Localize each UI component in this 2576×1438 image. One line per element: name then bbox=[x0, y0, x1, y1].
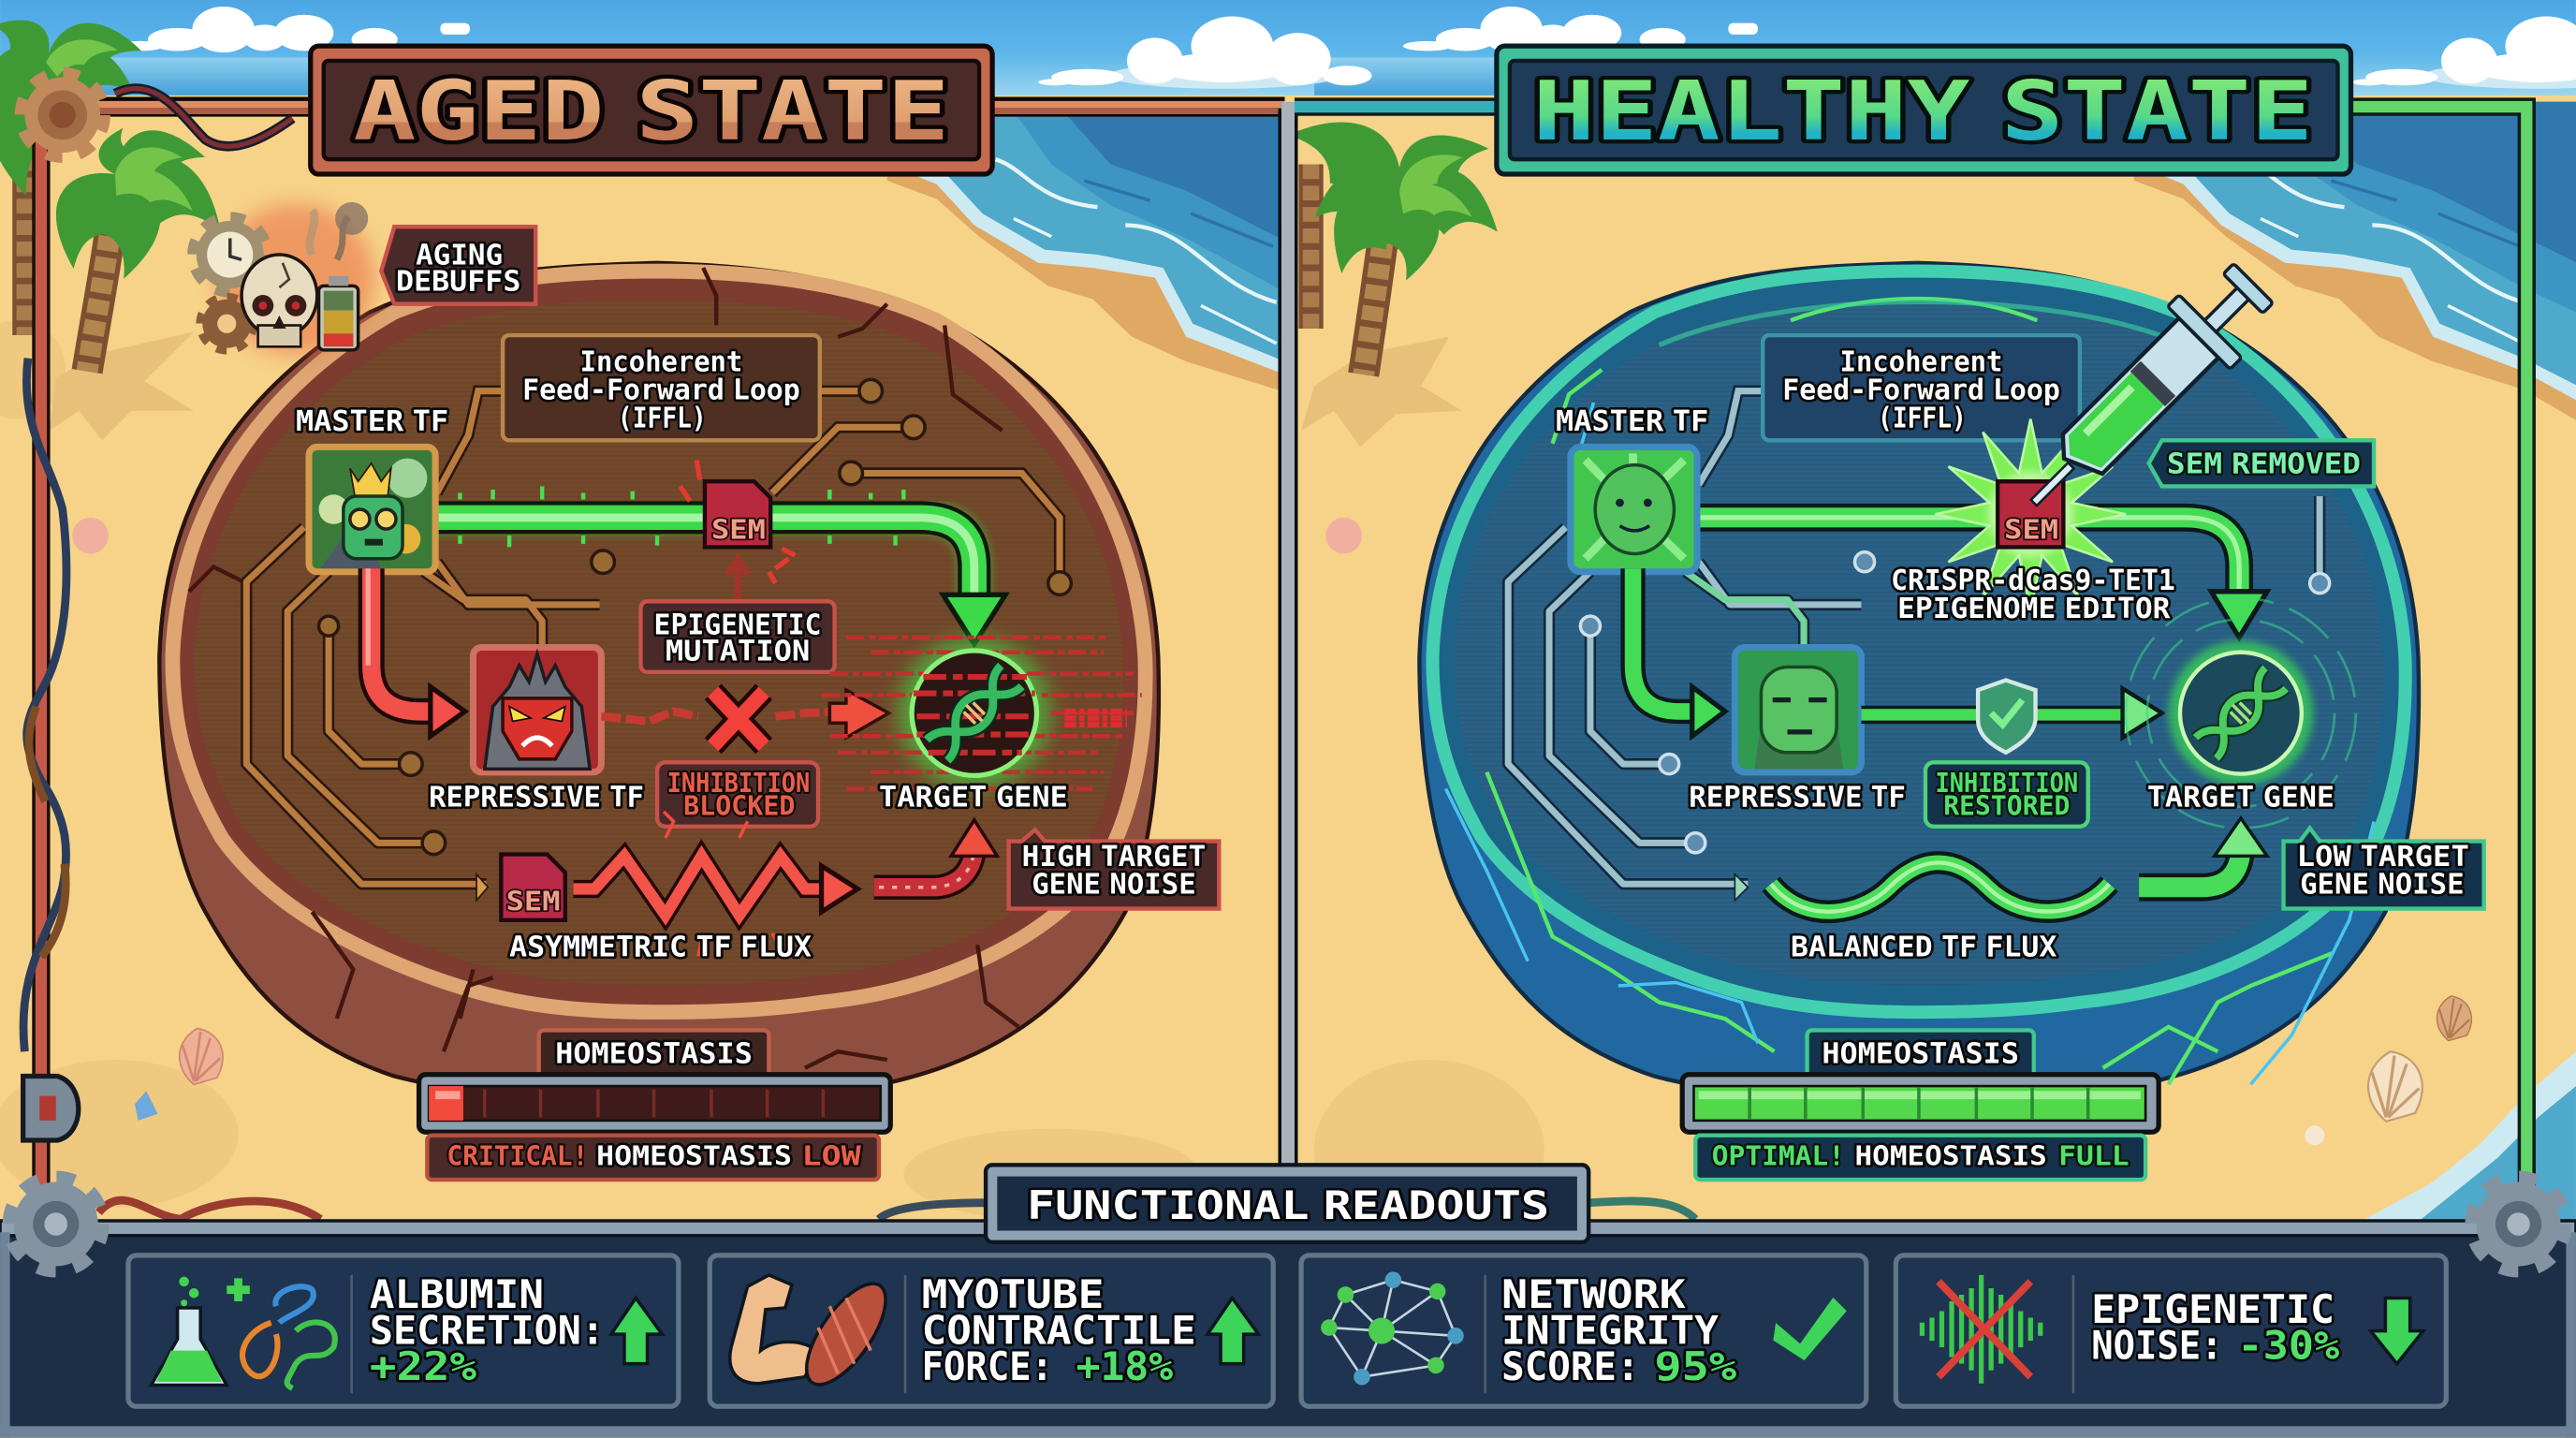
broken inhibition line bbox=[601, 690, 889, 746]
high target gene noise label: HIGH TARGET bbox=[1022, 841, 1206, 873]
frame: healthy panel pipes bbox=[1295, 107, 2526, 1199]
card: network integrity bbox=[1301, 1255, 1866, 1406]
homeostasis meter aged: HOMEOSTASIS bbox=[596, 1140, 792, 1171]
aging debuffs label bbox=[381, 227, 535, 304]
homeostasis meter aged: HOMEOSTASIS bbox=[555, 1038, 753, 1071]
icon: check mark bbox=[1776, 1301, 1843, 1357]
inhibition blocked label: INHIBITION bbox=[667, 768, 810, 799]
homeostasis meter aged bbox=[419, 1030, 890, 1180]
icon: master tf healthy bbox=[1571, 447, 1697, 572]
burst and sem mark healthy: SEM bbox=[2004, 515, 2058, 546]
iffl label healthy: Feed-Forward Loop bbox=[1782, 374, 2060, 406]
card: network integrity: SCORE: bbox=[1501, 1343, 1640, 1389]
burst and sem mark healthy bbox=[1935, 419, 2126, 609]
icon: master tf aged bbox=[309, 447, 435, 572]
aged cell oval bbox=[159, 263, 1159, 1097]
iffl label: Incoherent bbox=[580, 346, 742, 379]
icon: arm and muscle bbox=[730, 1271, 900, 1397]
noisy output arrow bbox=[874, 820, 997, 888]
low target gene noise label bbox=[2284, 829, 2484, 909]
homeostasis meter healthy: HOMEOSTASIS bbox=[1822, 1038, 2019, 1071]
palm trees bbox=[0, 2, 1508, 374]
card: albumin secretion: ALBUMIN bbox=[370, 1271, 544, 1317]
asymmetric flux zigzag bbox=[574, 812, 857, 956]
green arrow to repressive bbox=[1633, 568, 1725, 736]
frame: center divider bbox=[1278, 102, 1298, 1219]
mutation arrow bbox=[728, 559, 748, 600]
balanced output arrow bbox=[2139, 818, 2267, 888]
crispr editor label: EPIGENOME EDITOR bbox=[1897, 593, 2170, 625]
gear: right bbox=[2473, 1179, 2564, 1269]
card: epigenetic noise bbox=[1895, 1255, 2446, 1406]
epigenetic mutation label: MUTATION bbox=[666, 636, 810, 668]
card: myotube force: +18% bbox=[1076, 1343, 1174, 1389]
card: epigenetic noise: EPIGENETIC bbox=[2091, 1286, 2334, 1332]
crispr editor label: CRISPR-dCas9-TET1 bbox=[1891, 565, 2175, 597]
healthy cell oval bbox=[1419, 263, 2419, 1097]
icon: network bbox=[1321, 1271, 1464, 1385]
aged title banner: AGED STATE bbox=[353, 64, 949, 159]
sem removed label: SEM REMOVED bbox=[2167, 448, 2361, 480]
card: albumin secretion: +22% bbox=[370, 1343, 477, 1389]
icon: down arrow bbox=[2371, 1298, 2423, 1364]
inhibition blocked label: BLOCKED bbox=[683, 790, 795, 821]
sem doc lower: SEM bbox=[506, 886, 561, 917]
icon: repressive tf aged bbox=[474, 647, 601, 772]
aged circuit pipes bbox=[246, 379, 1071, 901]
master tf label healthy: MASTER TF bbox=[1556, 405, 1708, 438]
healthy title banner bbox=[1497, 46, 2351, 174]
card: myotube force: CONTRACTILE bbox=[922, 1308, 1196, 1354]
sem mark aged bbox=[681, 460, 795, 583]
low target gene noise label: GENE NOISE bbox=[2300, 869, 2465, 902]
icon: target gene aged bbox=[822, 638, 1142, 788]
target gene label: TARGET GENE bbox=[879, 782, 1068, 814]
inhibition restored label bbox=[1925, 762, 2088, 827]
card: albumin secretion: SECRETION: bbox=[370, 1308, 605, 1354]
homeostasis meter aged: LOW bbox=[802, 1140, 861, 1171]
homeostasis meter healthy: OPTIMAL! bbox=[1712, 1140, 1845, 1171]
sem doc lower bbox=[501, 855, 565, 920]
panel: healthy state bbox=[1419, 46, 2484, 1180]
icon: noise crossed bbox=[1922, 1275, 2041, 1384]
high target gene noise label: GENE NOISE bbox=[1032, 869, 1196, 902]
panel: aged state bbox=[159, 46, 1219, 1180]
card: network integrity: 95% bbox=[1654, 1343, 1737, 1389]
aging debuffs icons bbox=[194, 202, 374, 355]
readouts header: FUNCTIONAL READOUTS bbox=[1027, 1182, 1549, 1228]
healthy title banner: HEALTHY STATE bbox=[1532, 64, 2313, 159]
icon: target gene healthy bbox=[2126, 598, 2356, 829]
palm shadows bbox=[50, 332, 1462, 447]
homeostasis meter healthy: FULL bbox=[2058, 1140, 2130, 1171]
repressive tf label healthy: REPRESSIVE TF bbox=[1689, 782, 1906, 814]
gear: left bbox=[10, 1179, 101, 1269]
card: epigenetic noise: NOISE: bbox=[2091, 1322, 2223, 1368]
restored inhibition line bbox=[1862, 688, 2162, 738]
master tf label: MASTER TF bbox=[296, 405, 448, 438]
connector clamp bbox=[23, 1077, 79, 1140]
side cables bbox=[23, 359, 1695, 1219]
balanced flux wave bbox=[1771, 862, 2110, 912]
icon: flask bbox=[152, 1277, 250, 1385]
homeostasis meter healthy bbox=[1682, 1030, 2159, 1180]
card: myotube force: FORCE: bbox=[922, 1343, 1053, 1389]
card: myotube force: MYOTUBE bbox=[922, 1271, 1104, 1317]
card: network integrity: INTEGRITY bbox=[1501, 1308, 1719, 1354]
aged title banner bbox=[311, 46, 992, 174]
iffl label: (IFFL) bbox=[618, 402, 707, 434]
beach shells and pebbles bbox=[72, 518, 2471, 1145]
icon: shield check bbox=[1978, 681, 2036, 753]
icon: up arrow bbox=[611, 1298, 662, 1364]
epigenetic mutation label bbox=[641, 601, 835, 672]
iffl label: Feed-Forward Loop bbox=[522, 374, 800, 406]
target gene label healthy: TARGET GENE bbox=[2147, 782, 2334, 814]
icon: repressive tf healthy bbox=[1734, 647, 1862, 772]
inhibition restored label: INHIBITION bbox=[1935, 768, 2078, 799]
iffl label healthy: Incoherent bbox=[1840, 346, 2002, 379]
inhibition blocked label bbox=[657, 762, 818, 827]
healthy circuit pipes bbox=[1508, 391, 2330, 901]
crispr editor label bbox=[1891, 565, 2175, 625]
readouts header bbox=[986, 1165, 1588, 1242]
sea and beach right bbox=[2134, 102, 2576, 1224]
card: albumin secretion bbox=[128, 1255, 679, 1406]
frame: aged panel pipes bbox=[41, 88, 1284, 1224]
sem removed label bbox=[2149, 440, 2374, 486]
icon: up arrow bbox=[1208, 1298, 1258, 1364]
asymmetric tf flux label: ASYMMETRIC TF FLUX bbox=[509, 931, 812, 963]
inhibition restored label: RESTORED bbox=[1943, 790, 2070, 821]
red inhibition arrow bbox=[368, 568, 465, 736]
card: network integrity: NETWORK bbox=[1501, 1271, 1686, 1317]
aging debuffs label: DEBUFFS bbox=[396, 266, 520, 299]
green activation arrow healthy bbox=[1692, 518, 2267, 638]
homeostasis meter aged: CRITICAL! bbox=[446, 1140, 588, 1171]
iffl label healthy bbox=[1763, 335, 2080, 440]
sem mark aged: SEM bbox=[711, 515, 766, 546]
high target gene noise label bbox=[1009, 829, 1219, 909]
green activation arrow bbox=[431, 486, 1005, 644]
homeostasis meter healthy: HOMEOSTASIS bbox=[1854, 1140, 2047, 1171]
card: myotube force bbox=[710, 1255, 1273, 1406]
sea and beach left bbox=[887, 116, 1279, 390]
gear: top left bbox=[22, 75, 103, 155]
iffl label bbox=[503, 335, 820, 440]
aging debuffs label: AGING bbox=[416, 240, 503, 272]
icon: syringe bbox=[2002, 252, 2285, 535]
iffl label healthy: (IFFL) bbox=[1878, 402, 1967, 434]
low target gene noise label: LOW TARGET bbox=[2297, 841, 2469, 873]
balanced tf flux label: BALANCED TF FLUX bbox=[1791, 931, 2056, 963]
epigenetic mutation label: EPIGENETIC bbox=[654, 609, 822, 641]
panel: functional readouts bbox=[0, 1165, 2576, 1438]
card: epigenetic noise: -30% bbox=[2237, 1322, 2340, 1368]
repressive tf label: REPRESSIVE TF bbox=[429, 782, 644, 814]
icon: protein bbox=[242, 1286, 335, 1388]
